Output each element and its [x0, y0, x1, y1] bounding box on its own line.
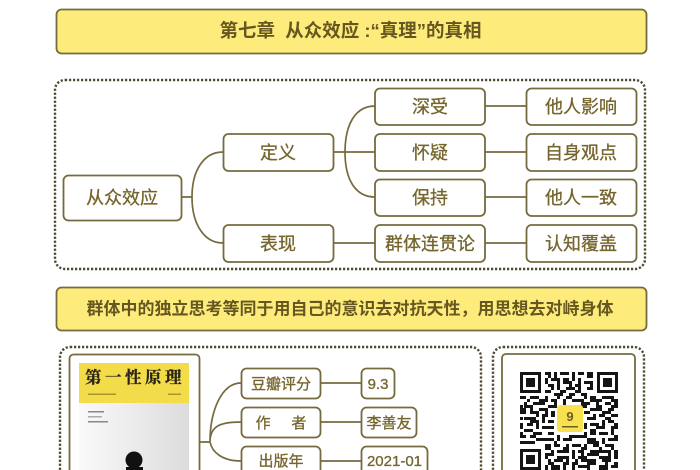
QR logo — [557, 405, 583, 432]
book cover — [79, 363, 189, 470]
quote banner: 群体中的独立思考等同于用自己的意识去对抗天性，用思想去对峙身体 — [86, 298, 614, 318]
QR code — [520, 372, 618, 470]
node: 出版年: 出版年 — [258, 453, 304, 470]
value: 9.3: 9.3 — [368, 376, 388, 393]
quote banner — [56, 288, 646, 330]
title banner: 第七章 从众效应 :“真理”的真相 — [219, 20, 482, 41]
QR logo: 9 — [566, 409, 574, 424]
node: 从众效应 — [64, 176, 182, 220]
node: 表现: 表现 — [260, 234, 296, 254]
book card — [70, 354, 200, 470]
panel: book info — [60, 347, 481, 470]
node: 群体连贯论: 群体连贯论 — [385, 234, 475, 254]
node: 他人一致 — [526, 180, 636, 216]
node: 从众效应: 从众效应 — [86, 188, 158, 208]
cover figure — [126, 452, 143, 470]
node: 深受: 深受 — [412, 97, 448, 117]
node: 豆瓣评分 — [242, 368, 320, 398]
node: 认知覆盖: 认知覆盖 — [545, 234, 617, 254]
node: 自身观点: 自身观点 — [545, 143, 617, 163]
node: 表现 — [224, 225, 334, 262]
node: 群体连贯论 — [375, 225, 485, 262]
node: 保持: 保持 — [412, 188, 448, 208]
book title: 第一性原理 — [85, 368, 185, 387]
node: 怀疑: 怀疑 — [412, 143, 448, 163]
node: 定义: 定义 — [260, 143, 296, 163]
node: 豆瓣评分: 豆瓣评分 — [251, 376, 311, 393]
panel: mind map — [55, 80, 645, 269]
node: 保持 — [375, 180, 485, 216]
value: 9.3 — [362, 368, 394, 398]
panel: QR code — [493, 347, 644, 470]
node: 怀疑 — [375, 134, 485, 171]
value: 李善友 — [362, 408, 416, 438]
node: 认知覆盖 — [526, 225, 636, 262]
cover small text — [88, 394, 116, 395]
value: 李善友: 李善友 — [366, 415, 412, 432]
node: 定义 — [224, 134, 334, 171]
value: 2021-01: 2021-01 — [367, 453, 422, 470]
node: 作者: 作 者 — [256, 415, 306, 432]
node: 他人影响 — [526, 88, 636, 125]
node: 深受 — [375, 88, 485, 125]
node: 自身观点 — [526, 134, 636, 171]
node: 他人一致: 他人一致 — [545, 188, 617, 208]
title banner — [56, 10, 646, 54]
node: 出版年 — [242, 446, 320, 470]
connectors — [181, 106, 526, 243]
connectors — [200, 383, 362, 461]
value: 2021-01 — [362, 446, 428, 470]
node: 他人影响: 他人影响 — [545, 97, 617, 117]
node: 作者 — [242, 408, 320, 438]
